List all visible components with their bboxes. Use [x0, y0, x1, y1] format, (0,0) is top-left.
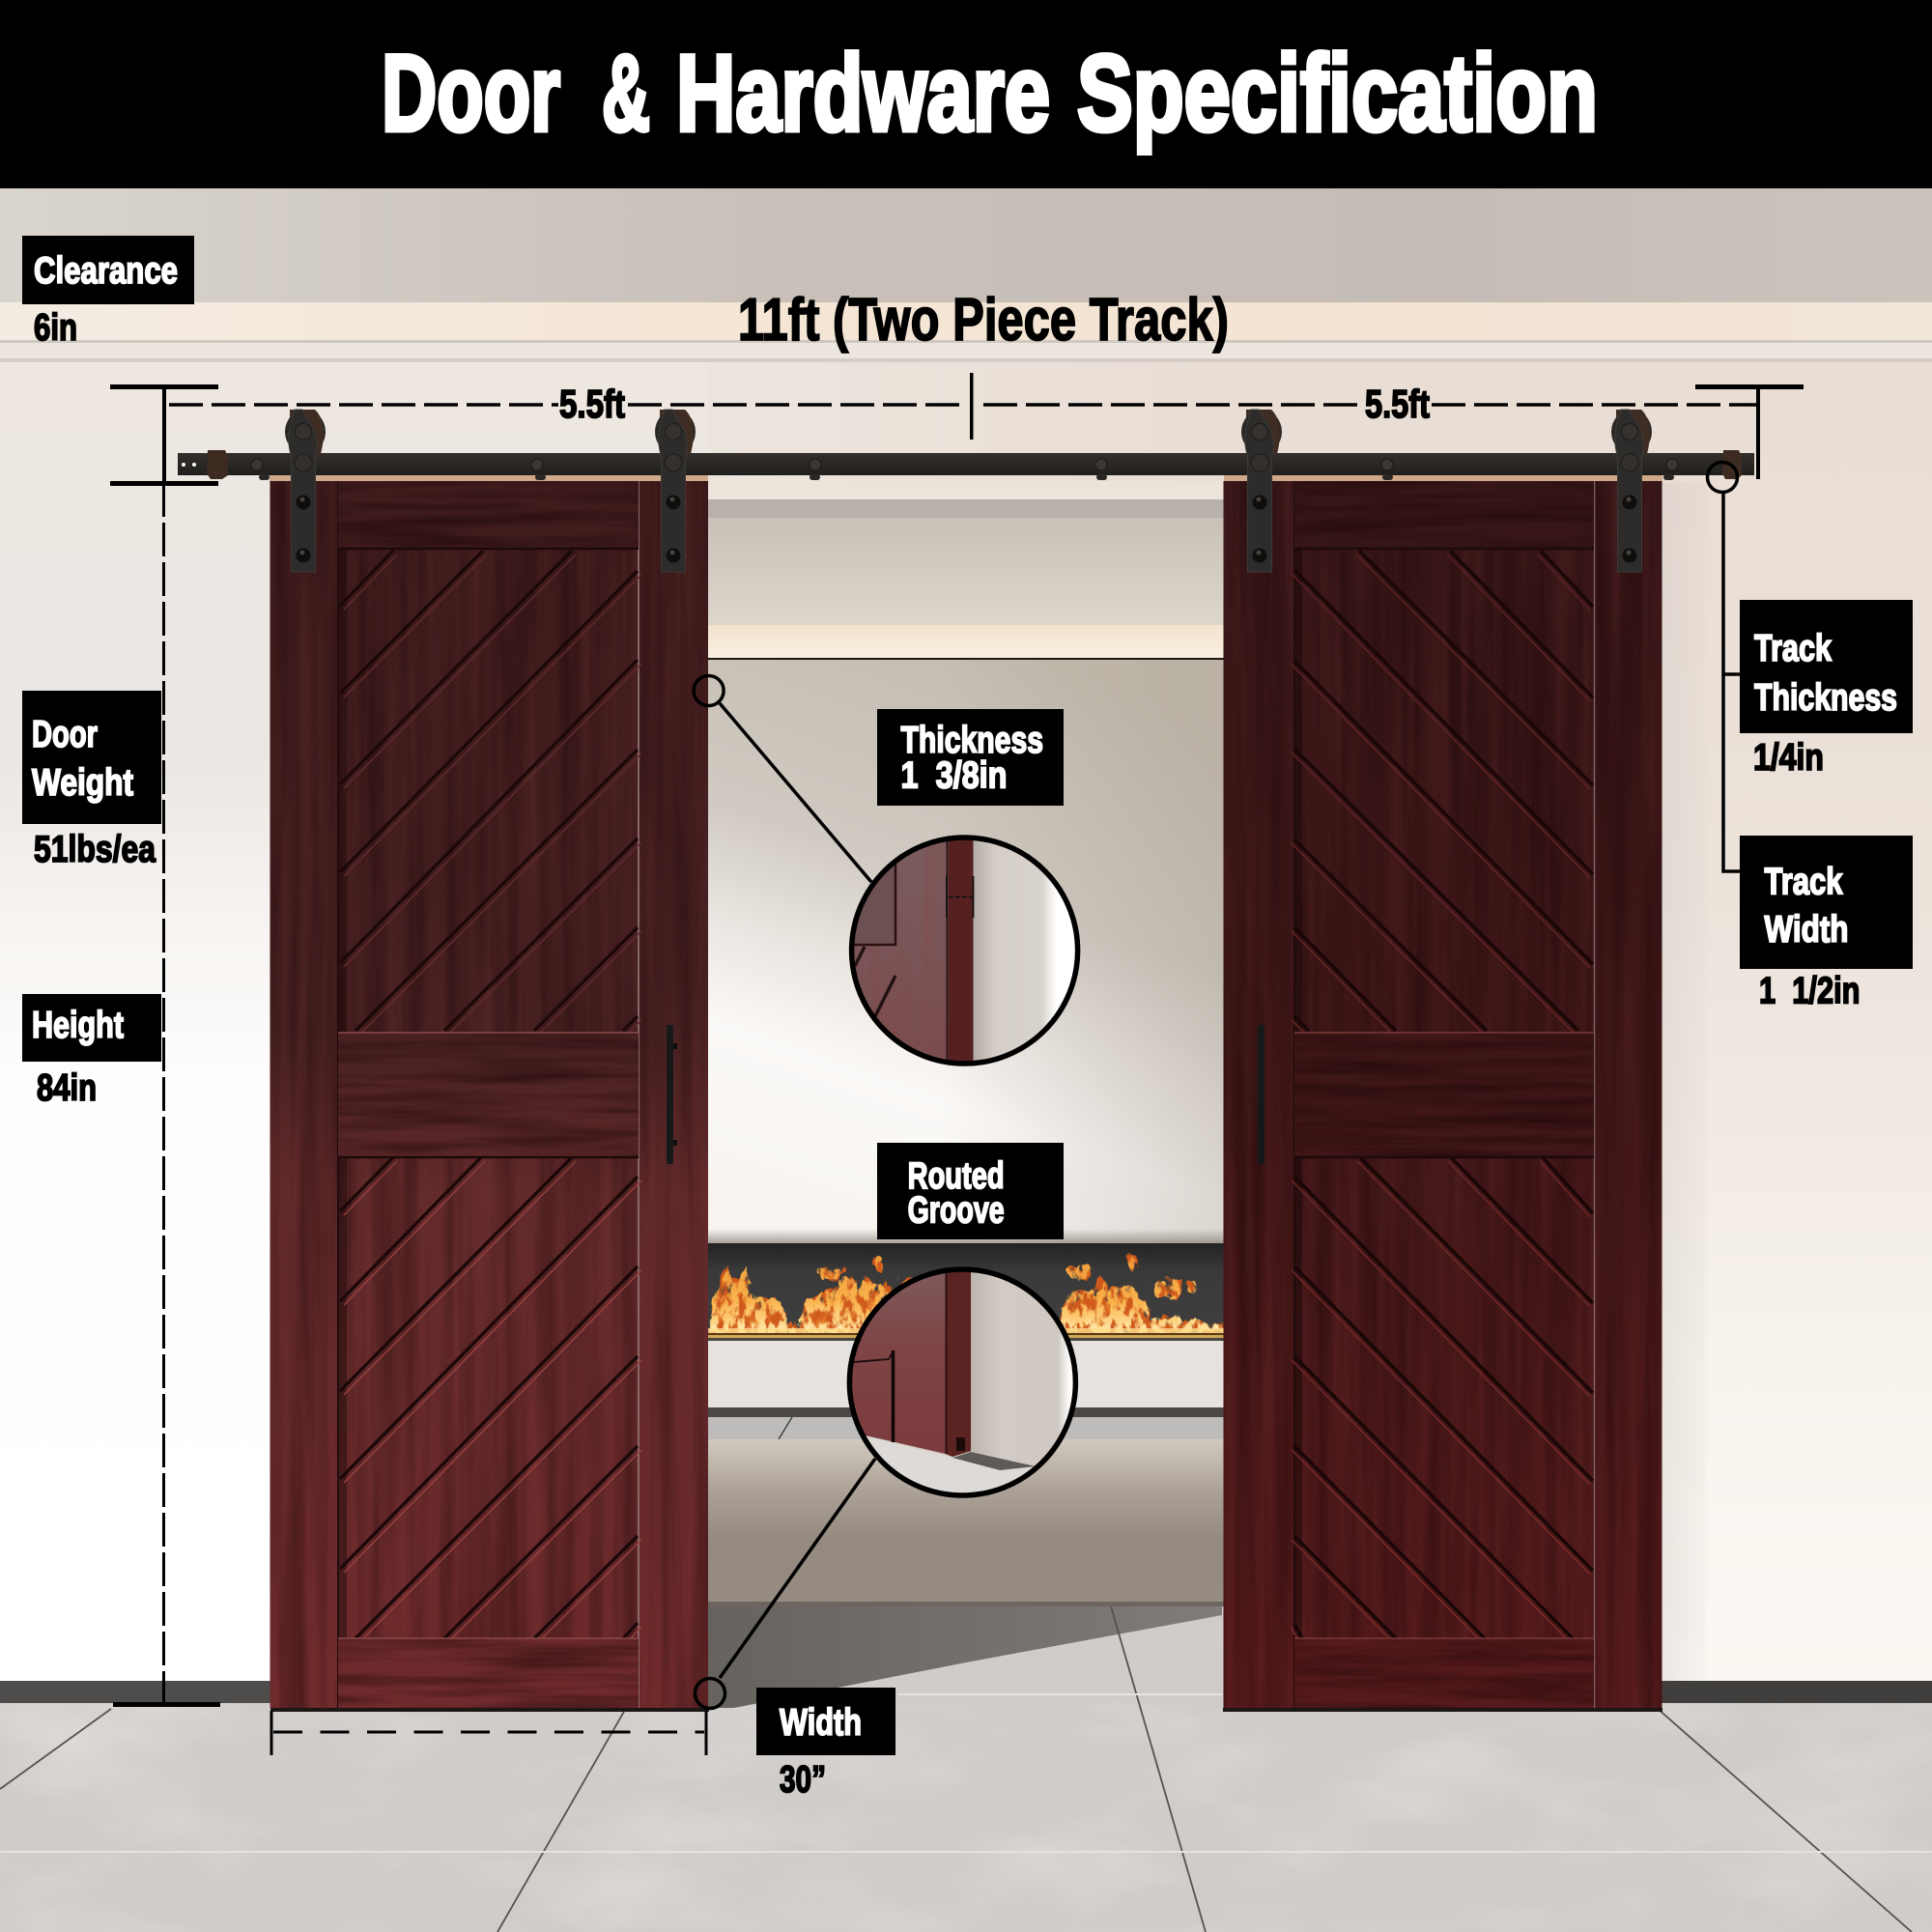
dimension: track total, left half: 5.5ft	[559, 382, 625, 426]
left door	[270, 481, 708, 1708]
crown moulding	[0, 340, 1932, 362]
track width label: Track	[1764, 862, 1843, 902]
track stops	[207, 450, 1742, 479]
routed groove label: Groove	[908, 1190, 1005, 1232]
hanger 1	[285, 410, 326, 572]
title: Door	[382, 33, 560, 154]
burner strip	[708, 1328, 1224, 1341]
wall above opening	[708, 362, 1224, 483]
opening: room behind the doors	[708, 481, 1224, 1606]
dimension: track total, right half: 5.5ft	[1365, 382, 1430, 426]
wall left	[0, 362, 715, 1681]
width callout pointer	[696, 1459, 875, 1708]
width label	[756, 1688, 895, 1801]
door weight label: 51lbs/ea	[34, 829, 156, 870]
hanger 3	[1241, 410, 1282, 572]
right door	[1223, 481, 1662, 1708]
routed groove label: Routed	[908, 1155, 1005, 1197]
left door bottom shadow	[270, 1708, 709, 1712]
height label: Height	[32, 1005, 124, 1046]
height dimension line	[113, 483, 220, 1707]
wall right	[1217, 362, 1932, 1681]
routed groove label	[877, 1143, 1064, 1239]
floor	[0, 1606, 1932, 1932]
concrete base	[708, 1341, 1224, 1407]
width label: 30”	[780, 1759, 826, 1801]
track thickness label: 1/4in	[1753, 737, 1824, 779]
clearance label: 6in	[34, 307, 77, 349]
door weight label: Weight	[32, 762, 133, 804]
barn door track	[178, 450, 1754, 480]
thickness label	[877, 709, 1064, 806]
right track bracket	[1695, 384, 1804, 479]
ceiling	[0, 188, 1932, 302]
floor shadow from door opening	[708, 1606, 1222, 1708]
thickness callout pointer	[694, 676, 871, 882]
door grooves	[340, 551, 641, 1642]
door weight label: Door	[32, 714, 98, 755]
baseboard	[0, 1681, 1932, 1703]
right door bottom shadow	[1223, 1708, 1662, 1712]
track width label: Width	[1764, 909, 1849, 951]
track length label: 11ft (Two Piece Track)	[738, 287, 1229, 354]
track width label	[1740, 836, 1913, 1012]
fireplace wall	[708, 1243, 1224, 1341]
door rails	[1294, 481, 1594, 1708]
hanger 2	[655, 410, 696, 572]
track shadow strip	[270, 473, 1662, 482]
door weight label	[22, 691, 161, 870]
wall shadow right of door	[1662, 483, 1708, 1681]
dimension: center tick	[970, 373, 974, 440]
door rails	[338, 481, 639, 1708]
clearance label	[22, 236, 194, 349]
magnifier: door thickness detail	[840, 831, 1084, 1072]
flames	[709, 1256, 1223, 1333]
height label	[22, 994, 161, 1109]
title: &	[602, 33, 650, 154]
clearance label: Clearance	[34, 250, 178, 292]
header bar	[0, 0, 1932, 188]
title	[382, 33, 1598, 154]
title: Hardware	[676, 33, 1050, 154]
door grooves	[1292, 551, 1593, 1642]
hanger 4	[1611, 410, 1652, 572]
left door handle	[667, 1025, 677, 1164]
height label: 84in	[37, 1067, 97, 1109]
title: Specification	[1077, 33, 1598, 154]
cove light band	[0, 302, 1932, 340]
right door handle	[1258, 1025, 1264, 1164]
width label: Width	[780, 1702, 862, 1744]
clearance bracket	[110, 384, 218, 486]
thickness label: Thickness	[900, 720, 1043, 761]
track thickness label	[1740, 600, 1913, 779]
width dimension	[271, 1711, 706, 1755]
floor tile joints	[0, 1606, 1932, 1932]
track width label: 1 1/2in	[1759, 970, 1861, 1012]
rug	[708, 1439, 1224, 1606]
magnifier: routed groove detail	[846, 1266, 1078, 1498]
track thickness label: Track	[1754, 628, 1832, 669]
thickness label: 1 3/8in	[900, 755, 1007, 797]
track callout lines	[1708, 462, 1740, 871]
